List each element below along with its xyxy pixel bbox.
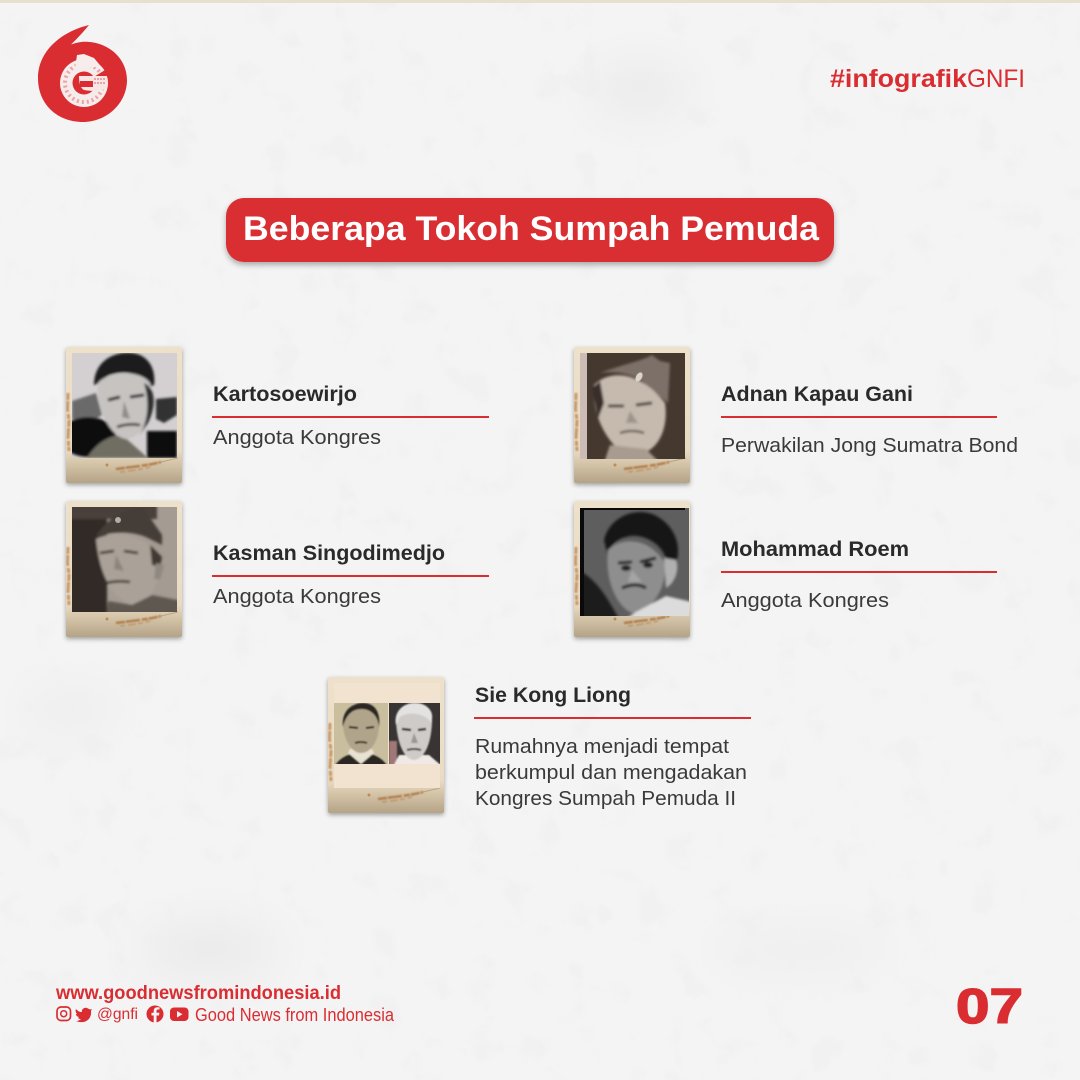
young portrait: [334, 703, 388, 764]
photo: Kasman Singodimedjo: [66, 501, 182, 637]
name: Kartosoewirjo: Kartosoewirjo: [213, 383, 357, 406]
name: Kasman Singodimedjo: Kasman Singodimedjo: [213, 542, 445, 565]
name: Sie Kong Liong: Sie Kong Liong: [475, 684, 631, 707]
icon: youtube: [170, 1008, 188, 1021]
photo: Mohammad Roem: [574, 501, 692, 637]
hashtag: #infografik: [830, 65, 967, 93]
photo: Adnan Kapau Gani: [574, 347, 690, 483]
icon: instagram: [57, 1007, 70, 1020]
title banner: Beberapa Tokoh Sumpah Pemuda: [243, 210, 820, 248]
name: Adnan Kapau Gani: [721, 383, 1018, 457]
name: Kartosoewirjo: Anggota Kongres: [213, 427, 381, 449]
title banner: [226, 198, 834, 262]
footer: website and social: [55, 983, 395, 1025]
name: Mohammad Roem: Anggota Kongres: [721, 590, 889, 612]
name: Kasman Singodimedjo: [212, 542, 489, 608]
name: Sie Kong Liong: Rumahnya menjadi tempat: [475, 736, 729, 758]
name: Sie Kong Liong: [474, 684, 751, 810]
name: Adnan Kapau Gani: Perwakilan Jong Sumatra Bond: [721, 435, 1018, 457]
icon: twitter: [76, 1008, 92, 1022]
icon: facebook: [146, 1006, 164, 1022]
footer: website and social: www.goodnewsfromindonesia.id: [55, 983, 341, 1004]
hashtag: GNFI: [967, 65, 1025, 93]
name: Mohammad Roem: [721, 538, 997, 612]
name: Sie Kong Liong: berkumpul dan mengadakan: [475, 762, 747, 784]
elderly portrait: [389, 703, 440, 764]
footer: website and social: Good News from Indonesia: [195, 1005, 395, 1025]
name: Adnan Kapau Gani: Adnan Kapau Gani: [721, 383, 913, 406]
footer: website and social: @gnfi: [97, 1006, 138, 1023]
name: Mohammad Roem: Mohammad Roem: [721, 538, 909, 561]
logo: GNFI: [38, 25, 127, 122]
hashtag: [830, 65, 1025, 93]
photo: Sie Kong Liong: [328, 677, 444, 813]
photo: Kartosoewirjo: [60, 347, 182, 483]
logo emblem: [60, 54, 110, 107]
page number: 07: [956, 980, 1023, 1034]
name: Sie Kong Liong: Kongres Sumpah Pemuda II: [475, 788, 736, 810]
name: Kasman Singodimedjo: Anggota Kongres: [213, 586, 381, 608]
name: Kartosoewirjo: [212, 383, 489, 449]
